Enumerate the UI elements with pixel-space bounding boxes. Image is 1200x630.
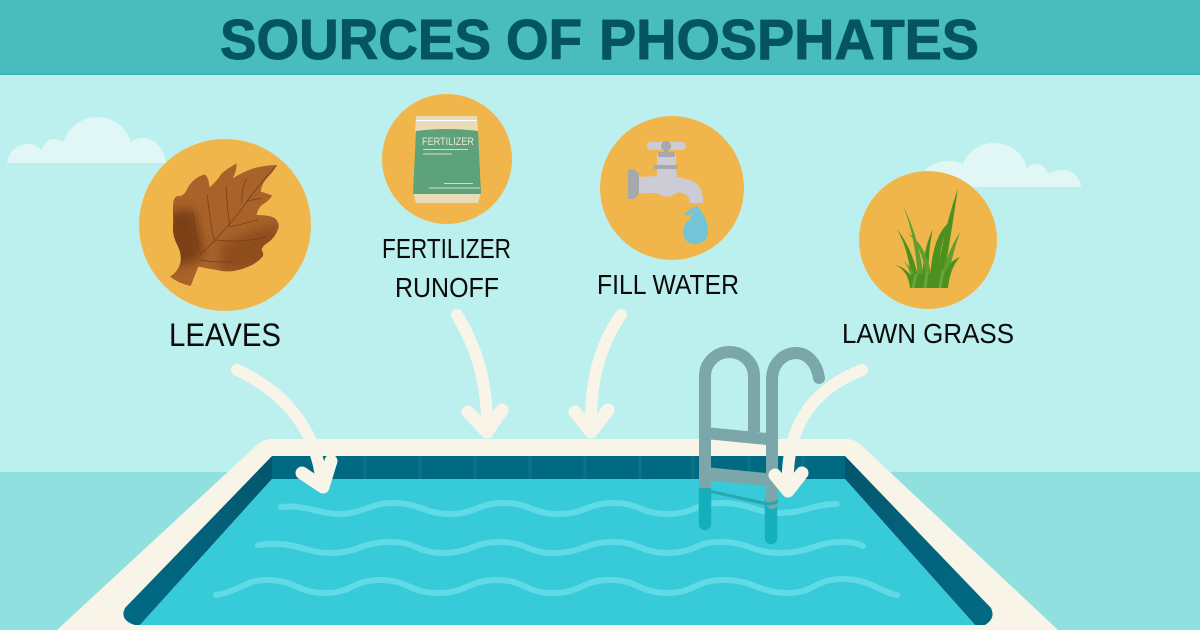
label: fill water: FILL WATER bbox=[597, 269, 739, 300]
waves bbox=[216, 503, 897, 595]
title bbox=[220, 8, 979, 72]
pool back wall bbox=[272, 456, 845, 480]
grass icon bbox=[859, 171, 997, 309]
title: OF bbox=[506, 8, 582, 72]
fertilizer icon bbox=[382, 94, 512, 224]
leaves icon bbox=[139, 139, 311, 311]
label: lawn grass: LAWN GRASS bbox=[842, 318, 1014, 349]
label: fertilizer runoff: RUNOFF bbox=[395, 272, 499, 303]
pool right wall bbox=[845, 456, 993, 625]
water bbox=[140, 479, 975, 625]
header banner bbox=[0, 0, 1200, 75]
arrow: leaves bbox=[237, 370, 331, 487]
ladder rungs bbox=[705, 427, 767, 486]
ground bbox=[0, 472, 1200, 630]
ladder left rail bbox=[705, 352, 754, 488]
arrow: fertilizer bbox=[457, 315, 502, 432]
ladder right rail bbox=[772, 353, 819, 503]
label: leaves: LEAVES bbox=[169, 317, 281, 353]
cloud left bbox=[7, 117, 166, 163]
arrow: fill water bbox=[575, 315, 621, 432]
pool ladder bbox=[699, 352, 819, 538]
pool left wall bbox=[123, 456, 272, 625]
pool coping bbox=[57, 439, 1058, 630]
arrow: lawn grass bbox=[775, 370, 862, 491]
title: SOURCES bbox=[220, 8, 491, 72]
ladder water line bbox=[699, 487, 778, 506]
label: fertilizer runoff: FERTILIZER bbox=[382, 233, 511, 264]
label: fertilizer runoff bbox=[382, 233, 511, 303]
cloud right bbox=[915, 143, 1081, 187]
faucet icon bbox=[600, 116, 744, 260]
pool bbox=[57, 439, 1058, 630]
title: PHOSPHATES bbox=[599, 8, 979, 72]
ladder underwater rails bbox=[705, 488, 771, 538]
fertilizer icon: FERTILIZER bbox=[422, 136, 474, 148]
tile lines bbox=[365, 456, 803, 479]
